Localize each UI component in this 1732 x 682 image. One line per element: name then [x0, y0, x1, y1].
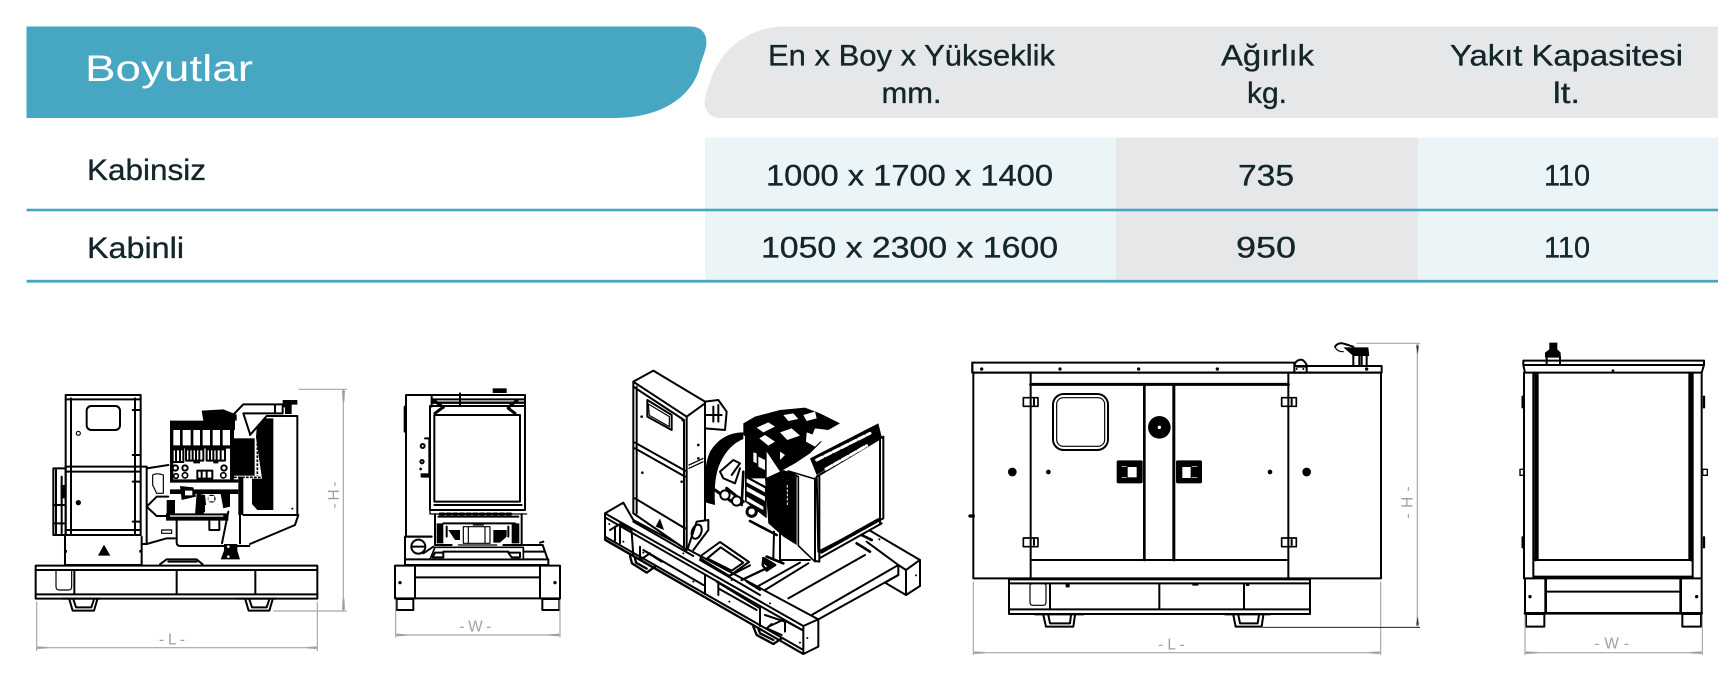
row value: fuel Kabinli: 110: [1544, 232, 1590, 264]
row value: dimensions Kabinli: 1050 x 2300 x 1600: [761, 232, 1058, 264]
dimension H and L lines: [973, 343, 1420, 655]
row value: weight Kabinli: 950: [1236, 232, 1296, 264]
engine highlights: [747, 412, 823, 510]
drawing: open generator end view: [395, 388, 560, 637]
door hinges: [1023, 398, 1296, 547]
row divider: Kabinli: [26, 280, 1718, 283]
drawing: open generator isometric view: [605, 371, 920, 654]
drawing: canopy generator end view: [1520, 343, 1707, 655]
drawing: open generator side view: [36, 389, 347, 651]
sump and mount: [177, 512, 249, 559]
column header: weight: Ağırlık: [1221, 40, 1315, 72]
inspection window: [1053, 394, 1108, 450]
column unit: kg: kg.: [1247, 77, 1287, 110]
alternator crescent: [704, 432, 743, 505]
engine cylinder rows: [173, 449, 227, 479]
panel: grey column header: [705, 26, 1718, 118]
row value: fuel Kabinsiz: 110: [1544, 160, 1590, 192]
row divider: Kabinsiz: [26, 209, 1718, 211]
row value: weight Kabinsiz: 735: [1238, 160, 1294, 192]
heading: Boyutlar: Boyutlar: [85, 48, 253, 89]
row value: dimensions Kabinsiz: 1000 x 1700 x 1400: [766, 160, 1053, 192]
radiator: [234, 400, 298, 544]
radiator front: [810, 423, 883, 562]
engine platform: [701, 542, 750, 576]
panel: blue header tab: [26, 26, 706, 118]
side panel: [405, 395, 433, 559]
base frame: [1009, 579, 1310, 627]
radiator side duct: [765, 470, 797, 545]
canopy roof and exhaust: [1523, 343, 1704, 373]
column unit: lt: lt.: [1553, 77, 1580, 110]
dimension H and L lines: - L -: [1158, 636, 1185, 653]
engine starter section: [166, 477, 243, 521]
isometric base frame: [605, 503, 920, 654]
canopy body: [970, 373, 1381, 578]
table cell backgrounds: [705, 138, 1718, 280]
mounting rail: [742, 557, 808, 590]
dimension W line: - W -: [459, 618, 491, 635]
front beam: [605, 503, 818, 654]
generator housing and warning triangle: [53, 465, 175, 565]
control panel: [66, 395, 141, 535]
engine and radiator: [704, 408, 883, 565]
column header: dimensions: En x Boy x Yükseklik: [768, 40, 1056, 72]
dimension H and L lines: - H -: [1399, 486, 1416, 518]
rear cross arm: [788, 531, 920, 619]
row label: Kabinli: Kabinli: [87, 232, 184, 265]
duct dots: [786, 485, 789, 507]
dimension H and L lines: - H -: [326, 482, 343, 508]
engine mounts: [430, 514, 548, 559]
dimension W line: [396, 600, 560, 637]
engine upper manifold: [170, 409, 237, 482]
column unit: mm: mm.: [882, 77, 942, 110]
control knob: [1148, 416, 1171, 439]
radiator: [430, 388, 527, 514]
door handles: [1117, 460, 1202, 483]
exhaust cap: [1335, 343, 1369, 365]
control panel: [633, 371, 727, 550]
column header: fuel capacity: Yakıt Kapasitesi: [1450, 40, 1683, 72]
base frame: [36, 566, 317, 611]
radiator shroud face: [788, 471, 815, 562]
drawing: canopy generator side view: [970, 343, 1420, 655]
dimension W line: [1525, 615, 1702, 655]
engine top: [743, 408, 840, 518]
air filter: [234, 438, 262, 477]
canopy body: [1520, 373, 1707, 578]
engine skid plate: [160, 559, 203, 564]
row label: Kabinsiz: Kabinsiz: [87, 154, 206, 187]
alternator details: [715, 460, 777, 535]
base frame: [395, 559, 560, 610]
dimension H and L lines: - L -: [159, 632, 185, 649]
engine block: [166, 400, 298, 559]
engine mount leg: [763, 532, 810, 565]
canopy roof: [972, 360, 1382, 373]
door latches: [1008, 468, 1311, 476]
base frame: [1525, 578, 1702, 627]
dimension H and L lines: [37, 389, 347, 651]
dimension W line: - W -: [1594, 636, 1629, 653]
